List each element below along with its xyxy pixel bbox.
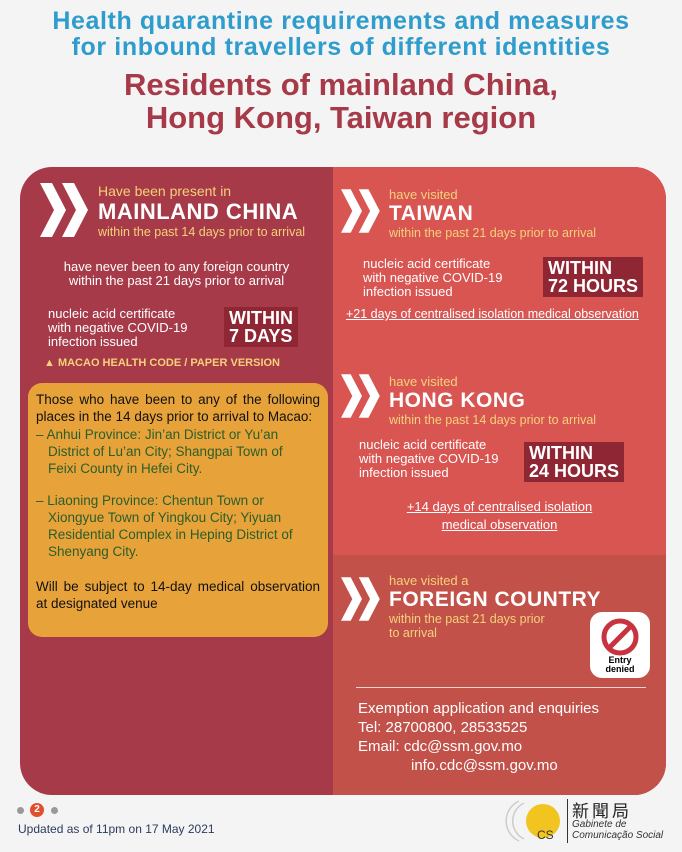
text: certificate [359, 437, 498, 480]
heading: hong kong: within the past 14 days prior to arrival [389, 413, 596, 427]
icon: chevrons [341, 374, 380, 418]
text: certificate [363, 256, 502, 299]
title: Residents of mainland China, [124, 67, 558, 102]
title: for inbound travellers of different identities [72, 33, 610, 61]
text: certificate: infection issued [359, 465, 449, 480]
text: certificate: infection issued [363, 284, 453, 299]
callout: orange box [28, 383, 328, 637]
callout: orange box: – Liaoning Province: Chentun Town or [36, 493, 264, 508]
text: certificate: with negative COVID-19 [48, 320, 187, 335]
icon: chevrons [341, 577, 380, 621]
heading: foreign: to arrival [389, 626, 437, 640]
panel: mainland china [40, 183, 305, 369]
heading: foreign: FOREIGN COUNTRY [389, 588, 601, 611]
title: Hong Kong, Taiwan region [146, 100, 536, 135]
page indicator [17, 803, 58, 817]
panel: taiwan [341, 187, 643, 321]
text: isolation 14: medical observation [442, 517, 557, 532]
badge: 72 hours [543, 257, 643, 297]
badge: 24 hours: WITHIN [529, 443, 593, 463]
text: certificate: infection issued [48, 334, 138, 349]
title [52, 7, 630, 135]
badge: 72 hours: WITHIN [548, 258, 612, 278]
logo: CS [537, 828, 554, 842]
logo: Comunicação Social [572, 830, 663, 841]
badge: 24 hours [524, 442, 624, 482]
icon: chevrons [341, 189, 380, 233]
text: certificate: with negative COVID-19 [363, 270, 502, 285]
text: isolation 14: +14 days of centralised isolation [407, 499, 592, 514]
callout: orange box: Will be subject to 14-day medical observation at designated venue [36, 579, 320, 611]
badge: 72 hours: 72 HOURS [548, 276, 638, 296]
heading: foreign [389, 573, 601, 640]
panel: foreign country [341, 573, 650, 774]
icon: entry denied: denied [605, 664, 634, 674]
text: certificate [48, 306, 187, 349]
text: health code: ▲ MACAO HEALTH CODE / PAPER VERSION [44, 357, 280, 369]
heading: taiwan: TAIWAN [389, 202, 473, 225]
panel: hong kong [341, 374, 624, 532]
text: never foreign: within the past 21 days prior to arrival [69, 273, 284, 288]
title: Health quarantine requirements and measures [52, 7, 630, 35]
callout: orange box: Xiongyue Town of Yingkou City; Yiyuan [48, 510, 281, 525]
heading: mainland china [98, 183, 305, 239]
heading: foreign: within the past 21 days prior [389, 612, 545, 626]
logo: Gabinete de [572, 819, 626, 830]
icon: entry denied [590, 612, 650, 678]
text: certificate: nucleic acid certificate [363, 256, 490, 271]
logo: 新聞局 [572, 802, 632, 821]
callout: orange box: District of Lu’an City; Shangpai Town of [48, 444, 283, 459]
badge: 7 days [224, 307, 298, 347]
heading: taiwan [389, 187, 596, 240]
text: contacts [358, 700, 599, 774]
text: contacts: Tel: 28700800, 28533525 [358, 719, 527, 736]
text: certificate: with negative COVID-19 [359, 451, 498, 466]
heading: taiwan: have visited [389, 187, 458, 202]
text: never foreign: have never been to any foreign country [64, 259, 289, 274]
heading: hong kong [389, 374, 596, 427]
text: contacts: Exemption application and enquiries [358, 700, 599, 717]
callout: orange box: Feixi County in Hefei City. [48, 461, 202, 476]
footer text: Updated as of 11pm on 17 May 2021 [18, 822, 215, 836]
page indicator: 2 [34, 804, 40, 815]
icon: entry denied: Entry [608, 655, 632, 665]
callout: orange box: – Anhui Province: Jin’an District or Yu’an [36, 427, 278, 442]
text: isolation 14 [406, 499, 592, 532]
badge: 7 days: 7 DAYS [229, 326, 292, 346]
badge: 24 hours: 24 HOURS [529, 461, 619, 481]
heading: mainland china: MAINLAND CHINA [98, 199, 298, 224]
text: isolation 21: +21 days of centralised isolation medical observation [346, 307, 639, 321]
heading: hong kong: HONG KONG [389, 389, 525, 412]
text: contacts: Email: cdc@ssm.gov.mo [358, 738, 522, 755]
callout: orange box: Shenyang City. [48, 544, 139, 559]
text: certificate: nucleic acid certificate [48, 306, 175, 321]
heading: hong kong: have visited [389, 374, 458, 389]
text: certificate: nucleic acid certificate [359, 437, 486, 452]
heading: mainland china: within the past 14 days prior to arrival [98, 225, 305, 239]
panel: main [20, 167, 666, 795]
text: contacts: info.cdc@ssm.gov.mo [411, 757, 558, 774]
logo [506, 799, 664, 843]
callout: orange box: Residential Complex in Heping District of [48, 527, 293, 542]
text: never foreign [64, 259, 290, 288]
badge: 7 days: WITHIN [229, 308, 293, 328]
icon: chevrons [40, 183, 88, 237]
heading: mainland china: Have been present in [98, 183, 231, 199]
heading: foreign: have visited a [389, 573, 468, 588]
heading: taiwan: within the past 21 days prior to arrival [389, 226, 596, 240]
callout: orange box: Those who have been to any of the following places in the 14 days prior to arrival to Macao: [36, 392, 320, 424]
